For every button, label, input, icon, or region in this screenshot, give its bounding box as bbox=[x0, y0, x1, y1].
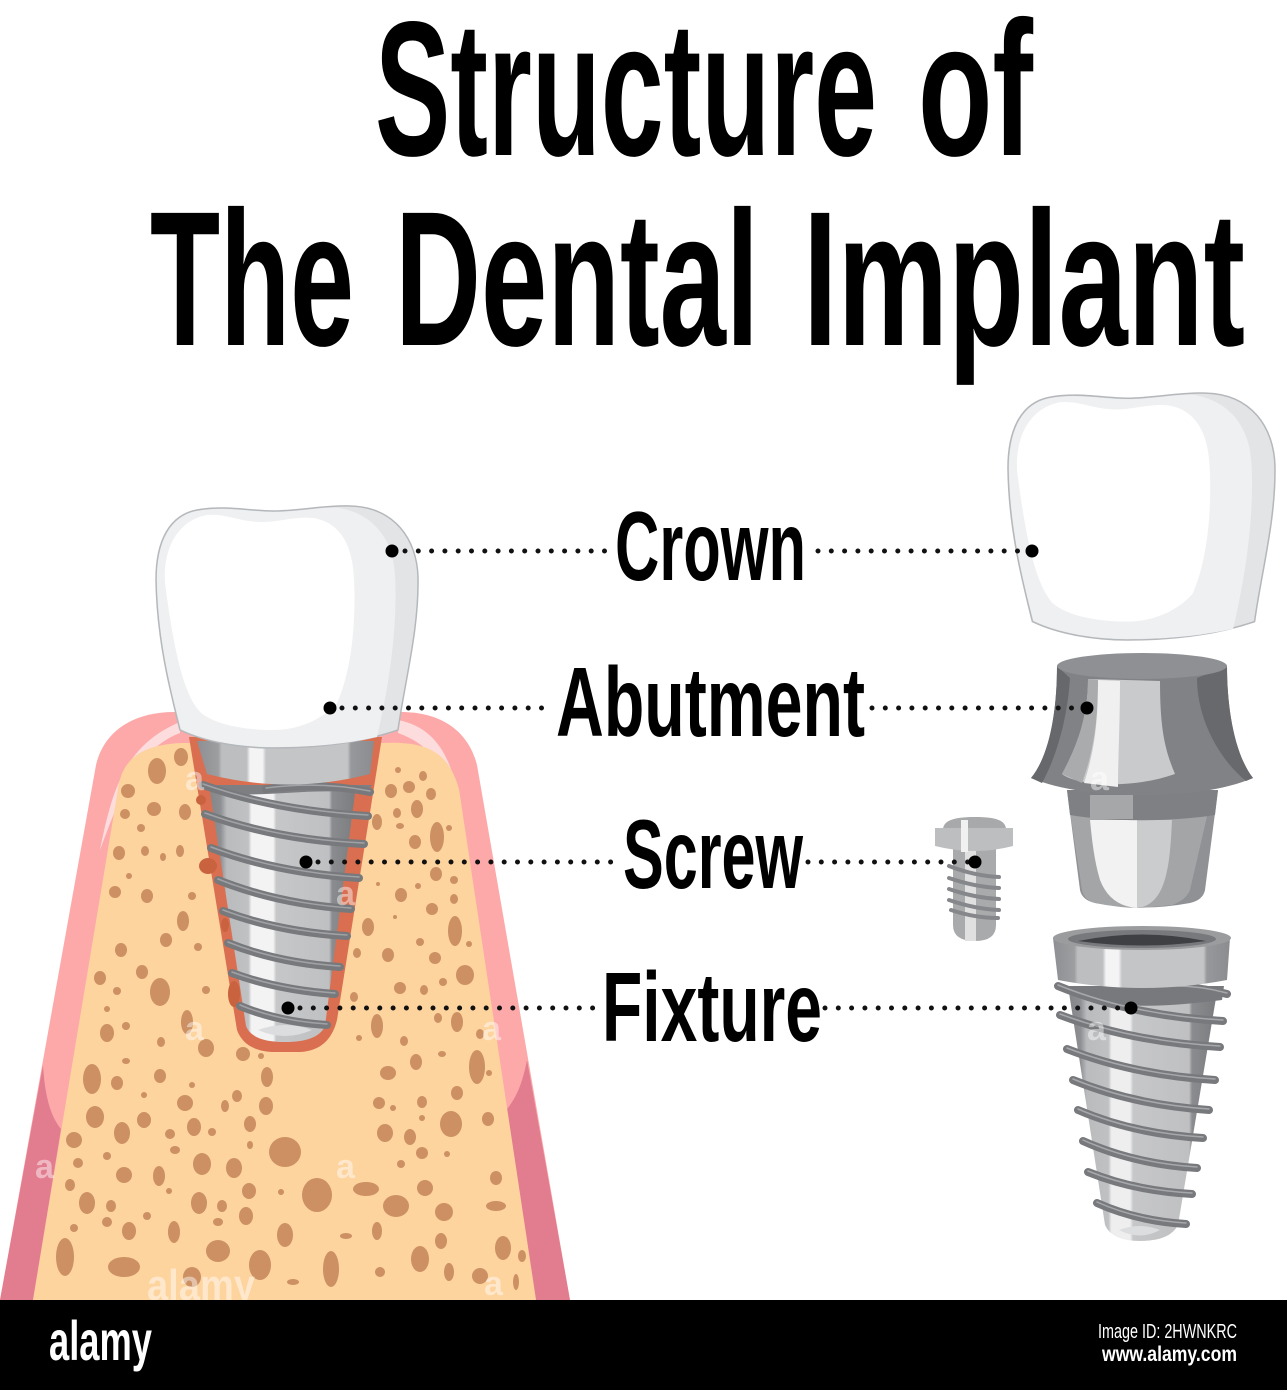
crown in place bbox=[156, 506, 418, 748]
bone pores bbox=[56, 748, 526, 1290]
footer logo: alamy bbox=[49, 1309, 152, 1372]
watermarks: a bbox=[336, 1148, 356, 1186]
abutment flared cap bbox=[1031, 653, 1253, 795]
exploded screw bbox=[935, 817, 1013, 941]
implant socket bbox=[189, 737, 382, 1052]
watermarks: a bbox=[35, 1148, 55, 1186]
watermarks bbox=[35, 760, 1110, 1310]
exploded crown bbox=[1008, 393, 1275, 640]
labels: Fixture bbox=[602, 952, 822, 1062]
watermarks: a bbox=[185, 760, 205, 798]
footer bar bbox=[0, 1300, 1287, 1390]
leader endpoint dots bbox=[282, 544, 1138, 1014]
title: Dental bbox=[395, 171, 759, 386]
implant fixture with screw thread bbox=[197, 741, 374, 1042]
gum tissue bbox=[0, 712, 570, 1300]
watermarks: a bbox=[185, 1010, 205, 1048]
watermarks: a bbox=[484, 1265, 504, 1303]
watermarks: a bbox=[1087, 1010, 1107, 1048]
exploded fixture bbox=[1053, 926, 1231, 1241]
footer image id: Image ID: 2HWNKRC bbox=[1098, 1321, 1237, 1343]
watermarks: a bbox=[1090, 760, 1110, 798]
title bbox=[150, 0, 1245, 386]
leader lines bbox=[300, 551, 1124, 1008]
abutment lower cone bbox=[1067, 790, 1218, 908]
labels: Abutment bbox=[556, 647, 865, 757]
bone bbox=[33, 743, 536, 1300]
watermarks: a bbox=[336, 875, 356, 913]
panel: implant in jaw cross-section bbox=[0, 506, 570, 1300]
labels: Screw bbox=[623, 799, 803, 909]
title: The bbox=[150, 171, 354, 386]
watermarks: alamy bbox=[147, 1261, 255, 1310]
fixture collar bbox=[1053, 938, 1230, 988]
exploded abutment bbox=[1031, 653, 1253, 908]
labels: Crown bbox=[615, 491, 806, 601]
watermarks: a bbox=[482, 1010, 502, 1048]
footer url: www.alamy.com bbox=[1101, 1343, 1237, 1366]
implant collar bbox=[197, 741, 374, 784]
labels bbox=[556, 491, 865, 1062]
